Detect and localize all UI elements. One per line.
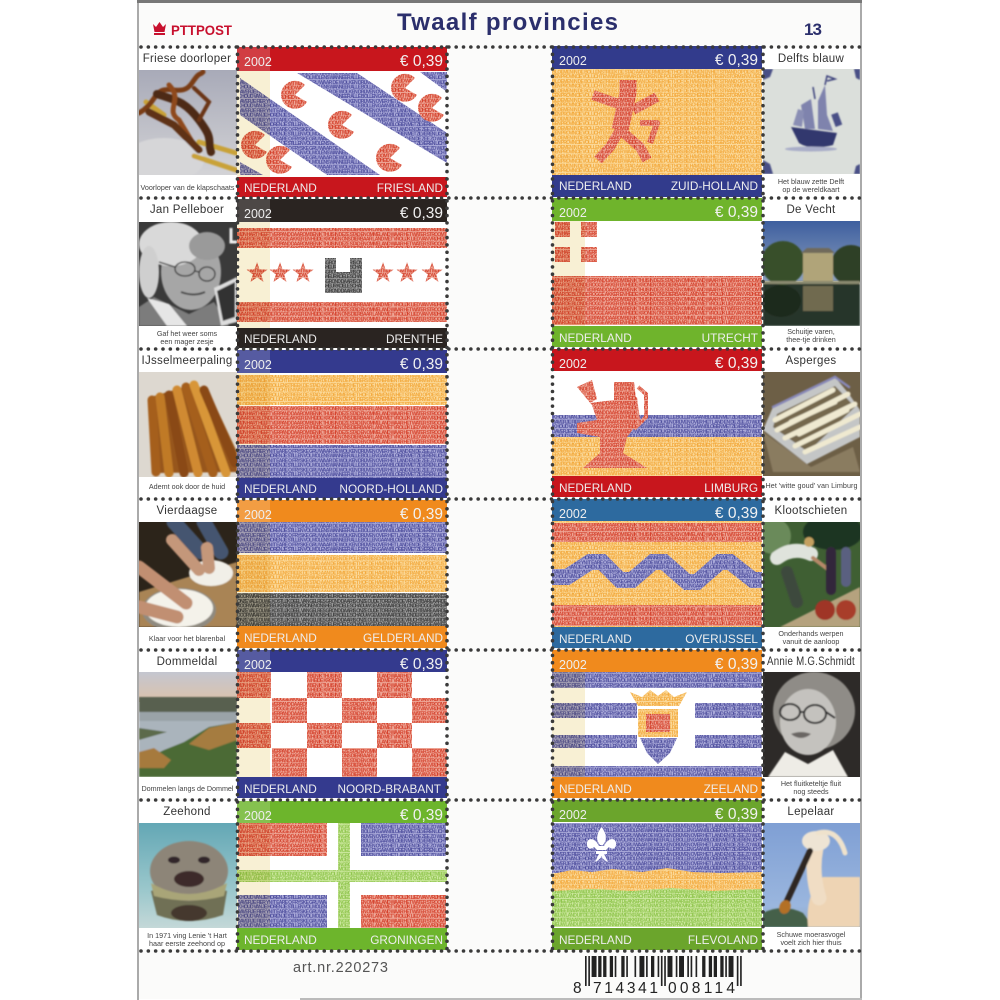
- sheet background: [137, 0, 862, 1000]
- header band: € 0,39: [400, 506, 443, 523]
- footer band: NEDERLAND: [244, 933, 317, 947]
- footer band: NEDERLAND: [244, 181, 317, 195]
- footer band: NEDERLAND: [559, 179, 632, 193]
- side panel: Annie M.G. Schmidt: [763, 650, 860, 798]
- flag: Zuid-Holland: [552, 69, 762, 175]
- header band: [237, 350, 447, 373]
- footer band: FRIESLAND: [377, 181, 443, 195]
- side panel: Delfts blauw: op de wereldkaart: [782, 185, 840, 194]
- header band: [552, 198, 762, 221]
- flag: Flevoland: [552, 822, 762, 928]
- side panel: De Vecht: De Vecht: [786, 204, 836, 216]
- side panel: Delfts blauw: Het blauw zette Delft: [778, 177, 844, 186]
- sheet number: 13: [804, 20, 822, 39]
- barcode: [573, 956, 742, 997]
- header band: € 0,39: [400, 205, 443, 222]
- footer band: ZUID-HOLLAND: [671, 179, 758, 193]
- footer band: ZEELAND: [704, 782, 758, 796]
- header band: € 0,39: [715, 656, 758, 673]
- header band: € 0,39: [400, 656, 443, 673]
- stamp: Zuid-Holland: [552, 46, 762, 197]
- stamp: Gelderland: [237, 500, 447, 648]
- header band: 2002: [559, 54, 587, 68]
- flag: Friesland: [237, 71, 447, 177]
- header band: 2002: [244, 207, 272, 221]
- side panel: Asperges: [763, 349, 860, 498]
- side panel: Annie M.G. Schmidt: Het fluitketeltje fluit: [781, 779, 841, 788]
- footer band: NEDERLAND: [244, 631, 317, 645]
- side panel: IJsselmeerpaling: [139, 350, 237, 498]
- side panel: Lepelaar: Lepelaar: [787, 806, 835, 818]
- header band: 2002: [244, 508, 272, 522]
- barcode: 008114: [668, 980, 735, 997]
- side panel: Jan Pelleboer: een mager zesje: [160, 337, 214, 346]
- article number: art.nr.220273: [293, 960, 388, 976]
- side panel: Vierdaagse: Vierdaagse: [157, 505, 217, 517]
- side panel: De Vecht: Schuitje varen,: [787, 327, 835, 336]
- side panel: Delfts blauw: [763, 47, 860, 197]
- footer band: [237, 928, 447, 950]
- logo: PTT Post: PTTPOST: [171, 22, 232, 38]
- header band: [237, 47, 447, 71]
- side panel: Dommeldal: Dommelen langs de Dommel: [142, 784, 234, 793]
- photo: road bowlers: [763, 522, 860, 627]
- side panel: Klootschieten: Klootschieten: [775, 505, 847, 517]
- stamp: Noord-Holland: [237, 350, 447, 498]
- stamp: Zeeland: [552, 650, 762, 798]
- header band: € 0,39: [715, 355, 758, 372]
- footer band: [237, 177, 447, 197]
- photo: Annie M.G. Schmidt portrait: [763, 672, 860, 777]
- photo: Jan Pelleboer portrait: [139, 222, 237, 326]
- photo: spoonbill: [763, 823, 860, 927]
- footer band: GRONINGEN: [370, 933, 443, 947]
- side panel: Klootschieten: vanuit de aanloop: [783, 637, 839, 646]
- header band: [552, 499, 762, 522]
- header band: 2002: [244, 55, 272, 69]
- header band: 2002: [559, 658, 587, 672]
- side panel: Lepelaar: voelt zich hier thuis: [780, 938, 842, 947]
- footer band: DRENTHE: [386, 332, 443, 346]
- flag: Gelderland: [237, 522, 447, 626]
- side panel: Friese doorloper: Friese doorloper: [143, 53, 231, 65]
- footer band: [237, 777, 447, 798]
- side panel: Vierdaagse: Klaar voor het blarenbal: [149, 634, 226, 643]
- side panel: Klootschieten: Onderhands werpen: [778, 629, 844, 638]
- header band: [237, 650, 447, 673]
- stamp: Overijssel: [552, 499, 762, 648]
- side panel: Zeehond: haar eerste zeehond op: [149, 939, 225, 948]
- header band: [552, 650, 762, 673]
- footer band: [552, 476, 762, 497]
- flag: Zeeland: [552, 672, 762, 777]
- header band: 2002: [244, 358, 272, 372]
- photo: Dommel valley: [139, 672, 237, 777]
- side panel: Dommeldal: [139, 650, 237, 798]
- header band: [237, 500, 447, 523]
- footer band: NEDERLAND: [244, 482, 317, 496]
- footer band: [237, 478, 447, 498]
- header band: € 0,39: [400, 356, 443, 373]
- side panel: Jan Pelleboer: Gaf het weer soms: [157, 329, 218, 338]
- header band: [552, 800, 762, 823]
- footer band: NEDERLAND: [559, 632, 632, 646]
- side panel: Vierdaagse: [139, 500, 237, 648]
- header band: € 0,39: [400, 53, 443, 70]
- side panel: Asperges: Asperges: [786, 355, 836, 367]
- flag: Noord-Holland: [237, 373, 447, 478]
- side panel: Zeehond: In 1971 ving Lenie 't Hart: [147, 931, 227, 940]
- header band: 2002: [244, 809, 272, 823]
- header band: 2002: [559, 507, 587, 521]
- header band: 2002: [244, 658, 272, 672]
- footer band: OVERIJSSEL: [685, 632, 758, 646]
- header band: [552, 46, 762, 69]
- side panel: Friese doorloper: [124, 48, 237, 197]
- title: Twaalf provincies: [397, 9, 618, 36]
- stamp: Groningen: [237, 801, 447, 950]
- stamp: Flevoland: [552, 800, 762, 950]
- footer band: NEDERLAND: [244, 332, 317, 346]
- footer band: NOORD-BRABANT: [337, 782, 441, 796]
- side panel: Lepelaar: [763, 800, 860, 950]
- footer band: NEDERLAND: [559, 782, 632, 796]
- stamp: Utrecht: [552, 198, 762, 347]
- header band: € 0,39: [715, 52, 758, 69]
- side panel: IJsselmeerpaling: Ademt ook door de huid: [149, 482, 225, 491]
- side panel: Jan Pelleboer: Jan Pelleboer: [150, 204, 224, 216]
- header band: € 0,39: [715, 204, 758, 221]
- side panel: Asperges: Het 'witte goud' van Limburg: [766, 481, 858, 490]
- header band: 2002: [559, 808, 587, 822]
- footer band: GELDERLAND: [363, 631, 443, 645]
- footer band: NEDERLAND: [559, 933, 632, 947]
- photo: feet in bowls: [139, 522, 237, 627]
- header band: € 0,39: [715, 505, 758, 522]
- side panel: Annie M.G. Schmidt: nog steeds: [793, 787, 829, 796]
- footer band: LIMBURG: [704, 481, 758, 495]
- footer band: [552, 326, 762, 347]
- footer band: UTRECHT: [702, 331, 758, 345]
- side panel: Annie M.G. Schmidt: Annie M.G.Schmidt: [767, 656, 855, 668]
- side panel: Jan Pelleboer: [139, 199, 237, 348]
- header band: € 0,39: [715, 806, 758, 823]
- photo: seal: [139, 823, 237, 928]
- photo: river and country house: [763, 221, 860, 326]
- flag: Drenthe: [237, 222, 447, 328]
- photo: Delft tile with ship: [763, 69, 860, 174]
- flag: Noord-Brabant: [237, 672, 447, 777]
- header band: [237, 801, 447, 824]
- side panel: De Vecht: [761, 198, 871, 348]
- side panel: Klootschieten: [755, 499, 863, 648]
- stamp: Drenthe: [237, 199, 447, 348]
- photo: smoked eels: [139, 372, 237, 477]
- photo: tray of asparagus: [763, 372, 860, 476]
- footer band: [552, 627, 762, 648]
- stamp: Noord-Brabant: [237, 650, 447, 798]
- barcode: 714341: [593, 980, 658, 997]
- footer band: NEDERLAND: [244, 782, 317, 796]
- header band: 2002: [559, 206, 587, 220]
- stamp: Friesland: [237, 47, 447, 197]
- footer band: [552, 928, 762, 950]
- side panel: Zeehond: [139, 801, 237, 949]
- stamp: Limburg: [552, 349, 762, 497]
- flag: Limburg: [552, 371, 762, 476]
- side panel: Zeehond: Zeehond: [163, 806, 211, 818]
- barcode: 8: [573, 980, 582, 997]
- flag: Overijssel: [552, 521, 762, 627]
- footer band: [552, 777, 762, 798]
- side panel: IJsselmeerpaling: IJsselmeerpaling: [141, 355, 233, 367]
- header band: € 0,39: [400, 807, 443, 824]
- side panel: Lepelaar: Schuwe moerasvogel: [777, 930, 846, 939]
- footer band: [237, 626, 447, 648]
- footer band: FLEVOLAND: [688, 933, 758, 947]
- photo: Frisian skate: [139, 70, 237, 175]
- footer band: [237, 328, 447, 348]
- side panel: Friese doorloper: Voorloper van de klapschaats: [140, 183, 235, 192]
- side panel: Dommeldal: Dommeldal: [157, 656, 217, 668]
- header band: [552, 349, 762, 372]
- header band: 2002: [559, 357, 587, 371]
- flag: Groningen: [237, 823, 447, 928]
- footer band: [552, 175, 762, 197]
- footer band: NOORD-HOLLAND: [339, 482, 443, 496]
- perforations: [141, 47, 860, 951]
- footer band: NEDERLAND: [559, 331, 632, 345]
- flag: Utrecht: [552, 221, 762, 326]
- header band: [237, 199, 447, 222]
- side panel: Delfts blauw: Delfts blauw: [778, 53, 845, 65]
- side panel: De Vecht: thee-tje drinken: [786, 335, 836, 344]
- footer band: NEDERLAND: [559, 481, 632, 495]
